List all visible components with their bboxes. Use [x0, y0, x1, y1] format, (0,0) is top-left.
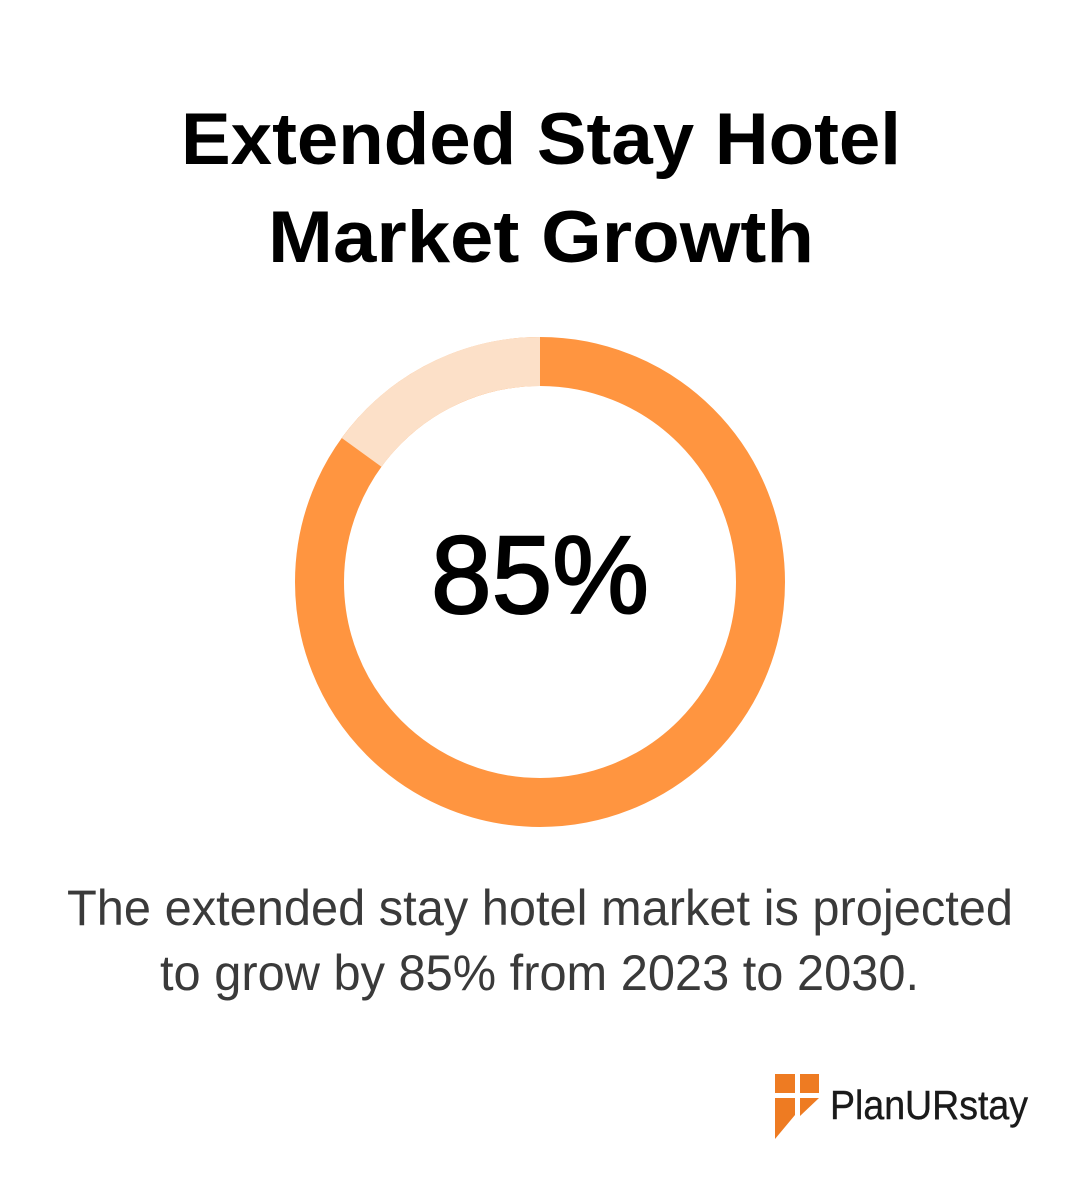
- title: Market Growth: [268, 197, 814, 278]
- logo wordmark: PlanURstay: [830, 1082, 1028, 1128]
- icon: logo mark: [775, 1074, 819, 1139]
- title: Extended Stay Hotel: [181, 99, 901, 180]
- logo: PlanURstay: [775, 1074, 1028, 1139]
- description text: [67, 880, 1013, 1001]
- donut centre value: 85%: [431, 514, 649, 637]
- description text: to grow by 85% from 2023 to 2030.: [160, 945, 919, 1001]
- donut chart: 85%: [320, 362, 760, 802]
- title: [181, 99, 901, 278]
- description text: The extended stay hotel market is projected: [67, 880, 1013, 936]
